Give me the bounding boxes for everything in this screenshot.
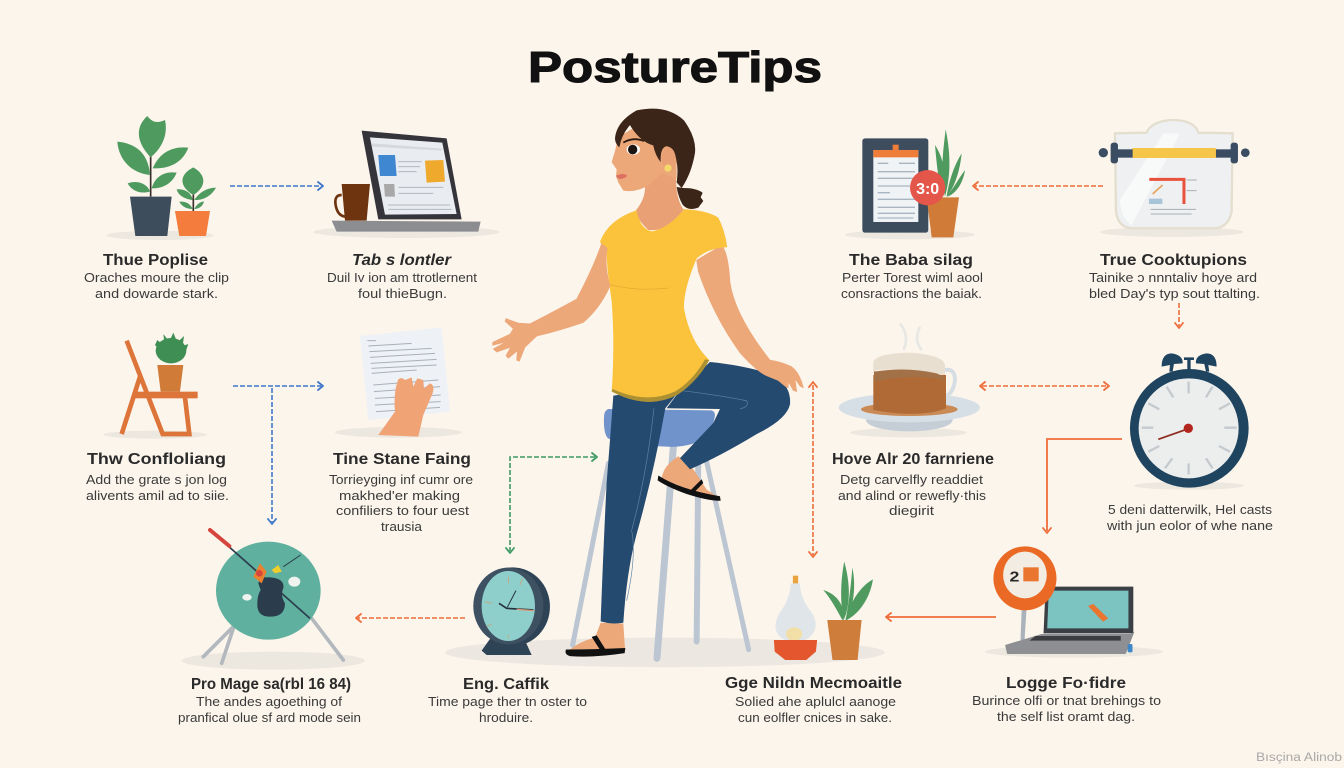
description line 2: pranfical olue sf ard mode sein: [178, 710, 361, 725]
icon: laptop with timer sign: [985, 546, 1163, 658]
arrow: pot to stopwatch: [1175, 303, 1183, 328]
icon: glass pot: [1099, 120, 1250, 237]
arrow: coffee and stopwatch double: [980, 382, 1109, 390]
heading: Thue Poplise: [103, 252, 208, 269]
bent leg: [667, 362, 790, 469]
description line 2: makhed'er making: [339, 488, 460, 503]
heading: Hove Alr 20 farnriene: [832, 451, 994, 468]
raised foot: [662, 456, 718, 497]
icon: chair with plant: [103, 333, 207, 439]
hair: [615, 109, 695, 188]
neck: [636, 164, 684, 230]
panel: Pro Mage: [178, 530, 365, 725]
icon: hand on paper: [335, 327, 462, 438]
icon: laptop and mug: [313, 131, 500, 238]
description: Duil Iv ion am ttrotlernent: [327, 270, 477, 285]
stool: [573, 409, 749, 658]
description line 2: bled Day's typ sout ttalting.: [1089, 286, 1260, 301]
arrow: green elbow: [506, 453, 597, 553]
arrow: chair to paper with branch: [233, 382, 323, 524]
description line 2: with jun eolor of whe nane: [1106, 518, 1273, 533]
icon: lamp and plant: [774, 562, 873, 660]
heading: The Baba silag: [849, 252, 973, 269]
description: Add the grate s jon log: [86, 472, 227, 487]
description: Burince olfi or tnat brehings to: [972, 693, 1161, 708]
description line 3: diegirit: [889, 503, 934, 518]
description: The andes agoething of: [196, 694, 342, 709]
panel: Gge Nildn Mecmoaitle: [725, 562, 902, 725]
icon: teal disc on tripod: [182, 530, 365, 670]
icon: laptop with timer sign: 2: [1009, 569, 1019, 585]
arrow: pot to clipboard: [973, 182, 1103, 190]
description line 2: and dowarde stark.: [95, 286, 218, 301]
standing leg: [601, 386, 683, 623]
icon: desk clock: [473, 567, 550, 655]
panel: True Cooktupions: [1089, 120, 1260, 301]
heading: Eng. Caffik: [463, 676, 549, 693]
icon: stopwatch: [1130, 353, 1249, 490]
central figure: woman on stool: [445, 109, 885, 667]
heading: Tine Stane Faing: [333, 451, 471, 468]
panel: The Baba silag: [841, 129, 983, 301]
description line 2: hroduire.: [479, 710, 533, 725]
description line 2: and alind or rewefly·this: [838, 488, 987, 503]
description: Detg carvelfly readdiet: [840, 472, 983, 487]
description line 3: confiliers to four uest: [336, 503, 469, 518]
description line 2: the self list oramt dag.: [997, 709, 1135, 724]
head: [612, 109, 703, 209]
panel: Tabs lontler: [313, 131, 500, 301]
arrow: plants to laptop: [230, 182, 323, 190]
description: 5 deni datterwilk, Hel casts: [1108, 502, 1273, 517]
icon: potted plants: [107, 116, 216, 240]
description line 2: foul thieBugn.: [358, 286, 447, 301]
arrow: orange vertical double: [809, 382, 817, 557]
standing foot: [570, 623, 625, 649]
right arm resting on knee: [697, 245, 803, 392]
sandal standing: [565, 635, 625, 657]
floor shadow: [445, 638, 885, 667]
description: Solied ahe aplulcl aanoge: [735, 694, 896, 709]
description: Oraches moure the clip: [84, 270, 229, 285]
panel: Tine Stane Faing: [329, 327, 473, 534]
description: Perter Torest wiml aool: [842, 270, 983, 285]
heading: Logge Fo·fidre: [1006, 675, 1126, 692]
panel: Logge Fo-fidre: [972, 546, 1163, 724]
heading: Gge Nildn Mecmoaitle: [725, 675, 902, 692]
watermark: Bısçina Alinob: [1256, 752, 1342, 764]
heading: Tab s lontler: [352, 252, 452, 269]
description: Torrieyging inf cumr ore: [329, 472, 473, 487]
panel: Hove Alr 20 farnriene: [832, 323, 994, 518]
earring: [664, 164, 672, 172]
panel: stopwatch tip: [1106, 353, 1273, 533]
t-shirt: [600, 209, 727, 402]
icon: clipboard with plant and badge: [845, 129, 975, 239]
sandal raised: [658, 476, 721, 501]
description line 2: consractions the baiak.: [841, 286, 982, 301]
description: Tainike ɔ nnntaliv hoye ard: [1089, 270, 1257, 285]
arrow: clock to disc: [356, 614, 465, 622]
icon: clipboard with plant and badge: 3:0: [916, 181, 939, 198]
left arm and hand: [493, 244, 610, 361]
description line 2: cun eolfler cnices in sake.: [738, 710, 892, 725]
panel: Thue Poplise: [84, 116, 229, 301]
arrow: stopwatch to sign: [1043, 439, 1122, 533]
heading: Pro Mage sa(rbl 16 84): [191, 676, 351, 693]
arrow: sign to lamp: [886, 613, 996, 621]
panel: Eng. Caffik: [428, 567, 587, 725]
description line 2: alivents amil ad to siie.: [86, 488, 229, 503]
panel: Thw Confloliang: [86, 333, 229, 503]
heading: True Cooktupions: [1100, 252, 1247, 269]
icon: coffee cup on saucer: [839, 323, 980, 437]
description: Time page ther tn oster to: [428, 694, 587, 709]
heading: Thw Confloliang: [87, 451, 226, 468]
title: PostureTips: [528, 43, 822, 92]
ponytail: [677, 187, 703, 209]
description line 4: trausia: [381, 519, 423, 534]
